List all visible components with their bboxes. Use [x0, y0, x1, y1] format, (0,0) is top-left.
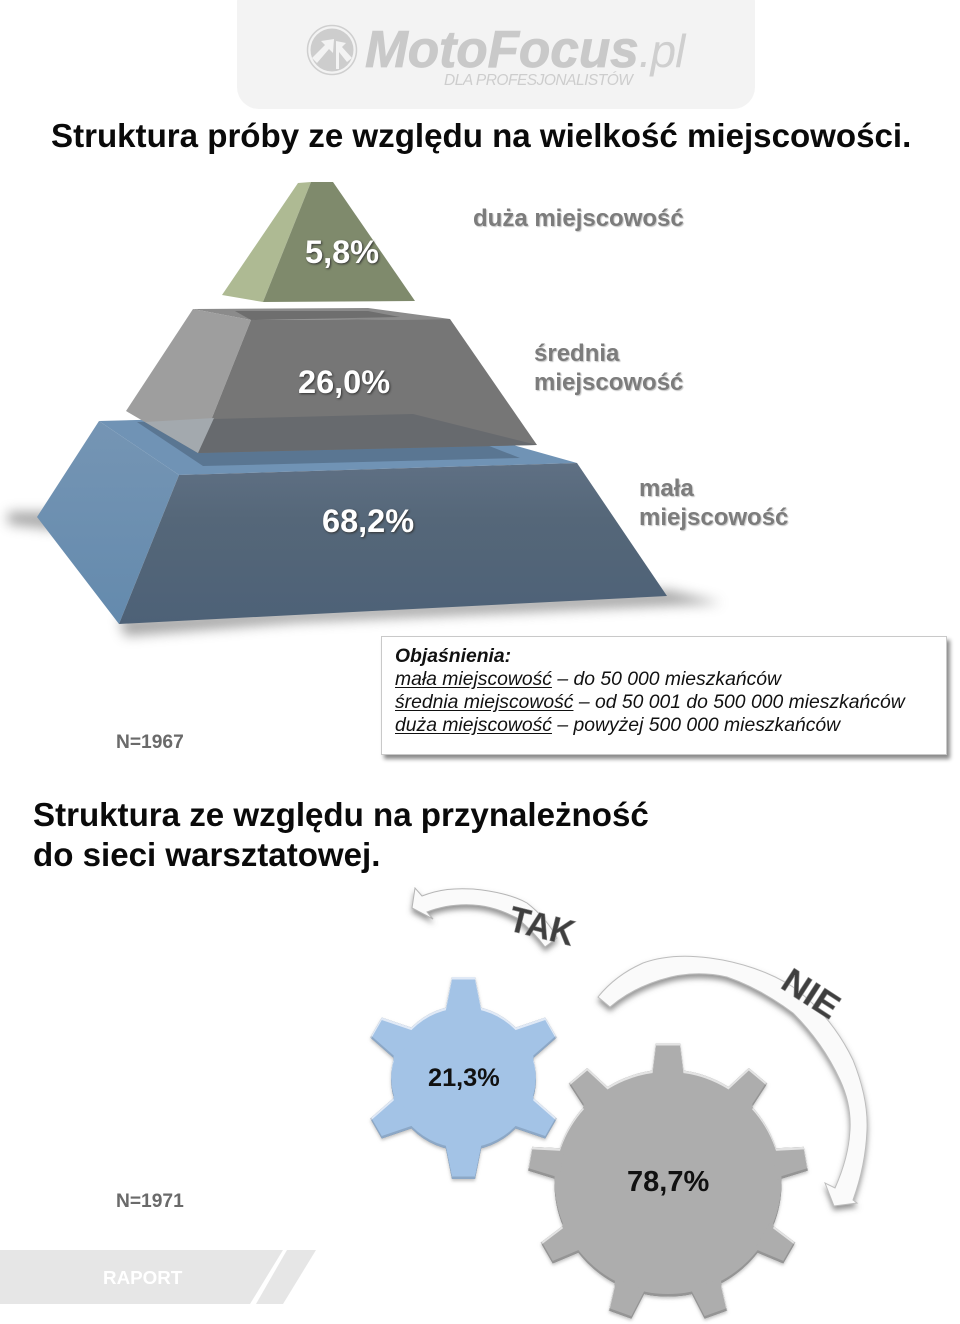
- value: 5,8%: 5,8%: [305, 234, 379, 270]
- logo emblem: [308, 26, 356, 74]
- label: średnia miejscowość: [534, 340, 684, 396]
- pyramid bottom tier: mała miejscowość: [37, 414, 667, 624]
- legend box: duża miejscowość – powyżej 500 000 mieszkańców: [395, 714, 840, 736]
- value: 68,2%: 68,2%: [322, 503, 414, 539]
- pyramid middle tier: średnia miejscowość: [126, 308, 537, 453]
- label: mała miejscowość: mała: [639, 475, 694, 502]
- title: sample structure by town size: Struktura próby ze względu na wielkość miejscowości.: [51, 118, 911, 155]
- NIE arrow: [598, 956, 867, 1206]
- heading: workshop network membership: [33, 797, 649, 874]
- logo tagline: DLA PROFESJONALISTÓW: [444, 72, 632, 89]
- label: duża miejscowość: duża miejscowość: [473, 205, 684, 232]
- TAK arrow: [412, 888, 557, 947]
- label: TAK: TAK: [505, 898, 579, 954]
- sample size: N=1967: N=1967: [116, 732, 184, 753]
- value: 78,7%: 78,7%: [627, 1166, 709, 1198]
- legend box: [381, 636, 947, 755]
- label: średnia miejscowość: średnia: [534, 340, 619, 367]
- sample size: N=1971: N=1971: [116, 1191, 184, 1212]
- footer label: RAPORT: RAPORT: [103, 1267, 182, 1288]
- label: średnia miejscowość: miejscowość: [534, 369, 683, 396]
- pyramid shadow: [8, 512, 722, 636]
- heading: workshop network membership: Struktura ze względu na przynależność: [33, 797, 649, 834]
- logo wordmark: MotoFocus.pl: [365, 20, 684, 78]
- value: 26,0%: 26,0%: [298, 364, 390, 400]
- logo banner: [237, 0, 755, 109]
- footer band: [0, 1250, 316, 1304]
- gear: blue 21,3%: [367, 977, 560, 1179]
- legend box: mała miejscowość – do 50 000 mieszkańców: [395, 668, 781, 690]
- legend box: średnia miejscowość – od 50 001 do 500 000 mieszkańców: [395, 690, 905, 712]
- heading: workshop network membership: do sieci warsztatowej.: [33, 837, 380, 874]
- gear: gray 78,7%: [527, 1043, 809, 1320]
- label: NIE: NIE: [775, 961, 847, 1027]
- value: 21,3%: 21,3%: [428, 1064, 500, 1092]
- label: mała miejscowość: miejscowość: [639, 504, 788, 531]
- legend box: Objaśnienia:: [395, 644, 511, 666]
- pyramid top tier: duża miejscowość: [222, 182, 415, 302]
- label: mała miejscowość: [639, 475, 789, 532]
